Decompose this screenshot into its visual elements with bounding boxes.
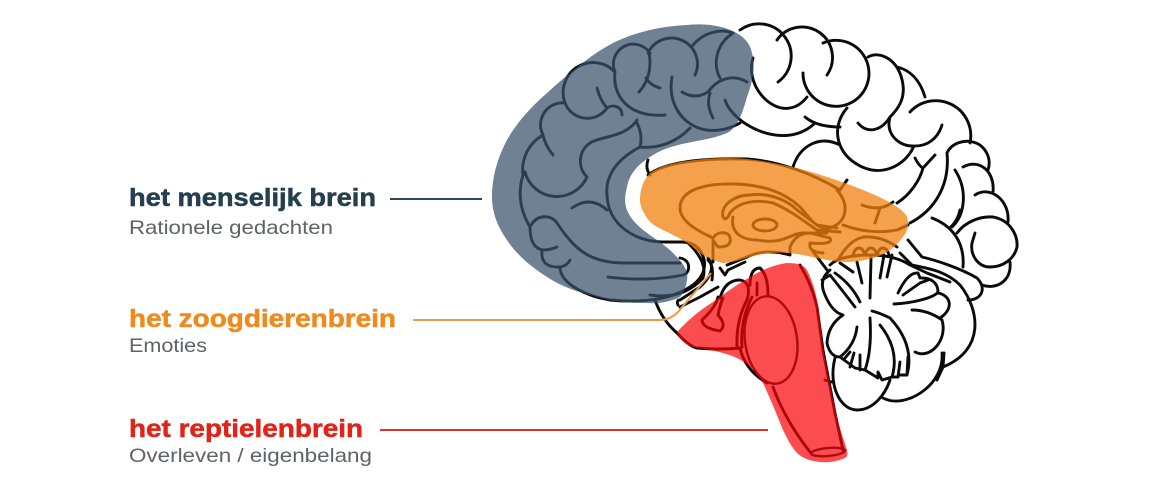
label: het menselijk brein: [129, 184, 376, 239]
parietal and occipital folds: [740, 24, 1008, 227]
brainstem edge: [773, 250, 843, 452]
lower limbic lines: [727, 202, 908, 265]
subtitle: emoties: Emoties: [129, 335, 207, 357]
temporal lobe folds: [900, 210, 1017, 380]
label: het zoogdierenbrein: [129, 305, 396, 357]
cerebellum lobes: [822, 255, 950, 410]
reptielenbrein region: red brainstem overlay: [677, 263, 847, 462]
lower frontal folds: [520, 172, 705, 301]
brain line drawing: [520, 24, 1017, 452]
leader line: zoogdierenbrein: [413, 273, 711, 320]
midbrain oval: [739, 293, 803, 387]
zoogdierenbrein region: orange limbic overlay: [640, 158, 908, 263]
heading: reptielenbrein: het reptielenbrein: [129, 415, 363, 443]
menselijk brein region: grey neocortex overlay: [492, 24, 754, 303]
frontal lobe folds: [523, 31, 815, 262]
label: het reptielenbrein: [129, 415, 372, 467]
leader line: menselijk brein: [390, 198, 482, 200]
midbrain loops: [650, 243, 768, 383]
limbic system lines: [647, 159, 847, 262]
leader line: reptielenbrein: [380, 429, 768, 431]
subtitle: overleven / eigenbelang: Overleven / eigenbelang: [129, 445, 372, 467]
thalamus ellipse: [753, 219, 777, 231]
heading: menselijk brein: het menselijk brein: [129, 184, 376, 212]
red region details: midbrain oval and stem base: [739, 293, 845, 457]
subtitle: rationele gedachten: Rationele gedachten: [129, 217, 333, 239]
stem base ellipse: [811, 447, 845, 457]
heading: zoogdierenbrein: het zoogdierenbrein: [129, 305, 396, 333]
